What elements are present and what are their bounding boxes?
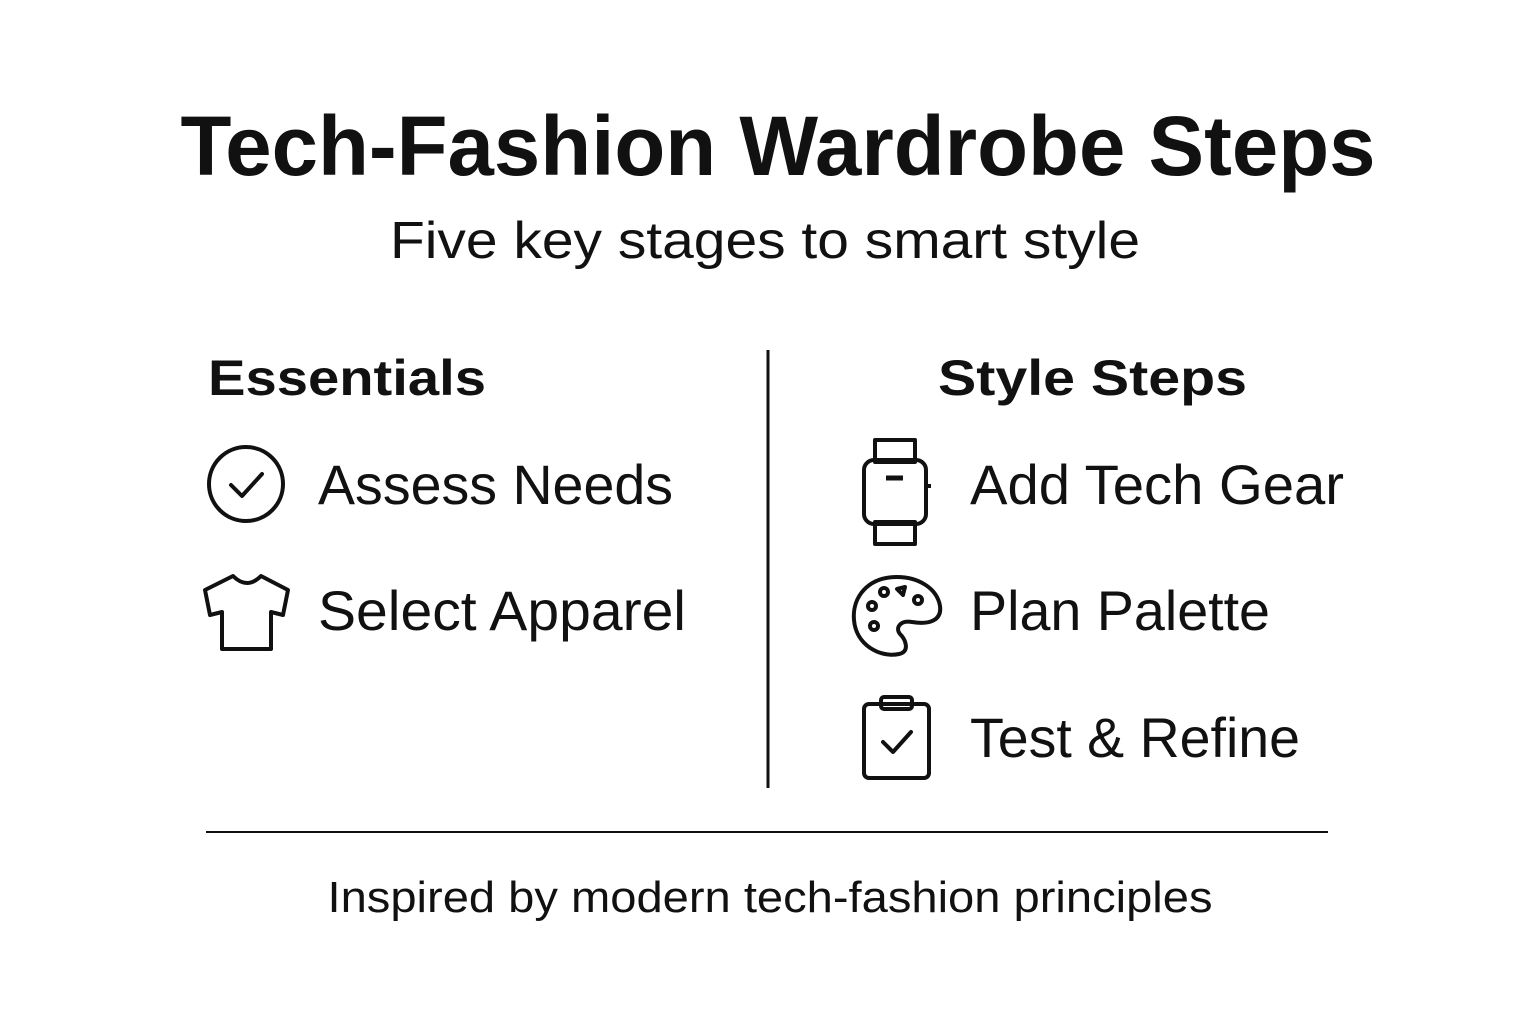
icon: smartwatch xyxy=(864,440,931,544)
subtitle: Five key stages to smart style xyxy=(390,212,1140,270)
heading: Essentials: Essentials xyxy=(208,350,486,406)
icon: palette xyxy=(854,577,940,655)
heading: Style Steps: Style Steps xyxy=(938,350,1247,406)
footer: Inspired by modern tech-fashion principles xyxy=(328,873,1212,922)
icon: t-shirt xyxy=(205,576,288,649)
icon: check circle xyxy=(209,447,283,521)
icon: clipboard xyxy=(864,697,929,778)
divider: vertical xyxy=(766,350,770,788)
item: Add Tech Gear: Add Tech Gear xyxy=(970,453,1344,516)
item: Assess Needs: Assess Needs xyxy=(318,453,673,516)
item: Plan Palette: Plan Palette xyxy=(970,579,1270,642)
item: Select Apparel: Select Apparel xyxy=(318,579,686,642)
item: Test & Refine: Test & Refine xyxy=(970,706,1300,769)
divider: horizontal xyxy=(206,831,1328,833)
title: Tech-Fashion Wardrobe Steps xyxy=(180,99,1376,193)
